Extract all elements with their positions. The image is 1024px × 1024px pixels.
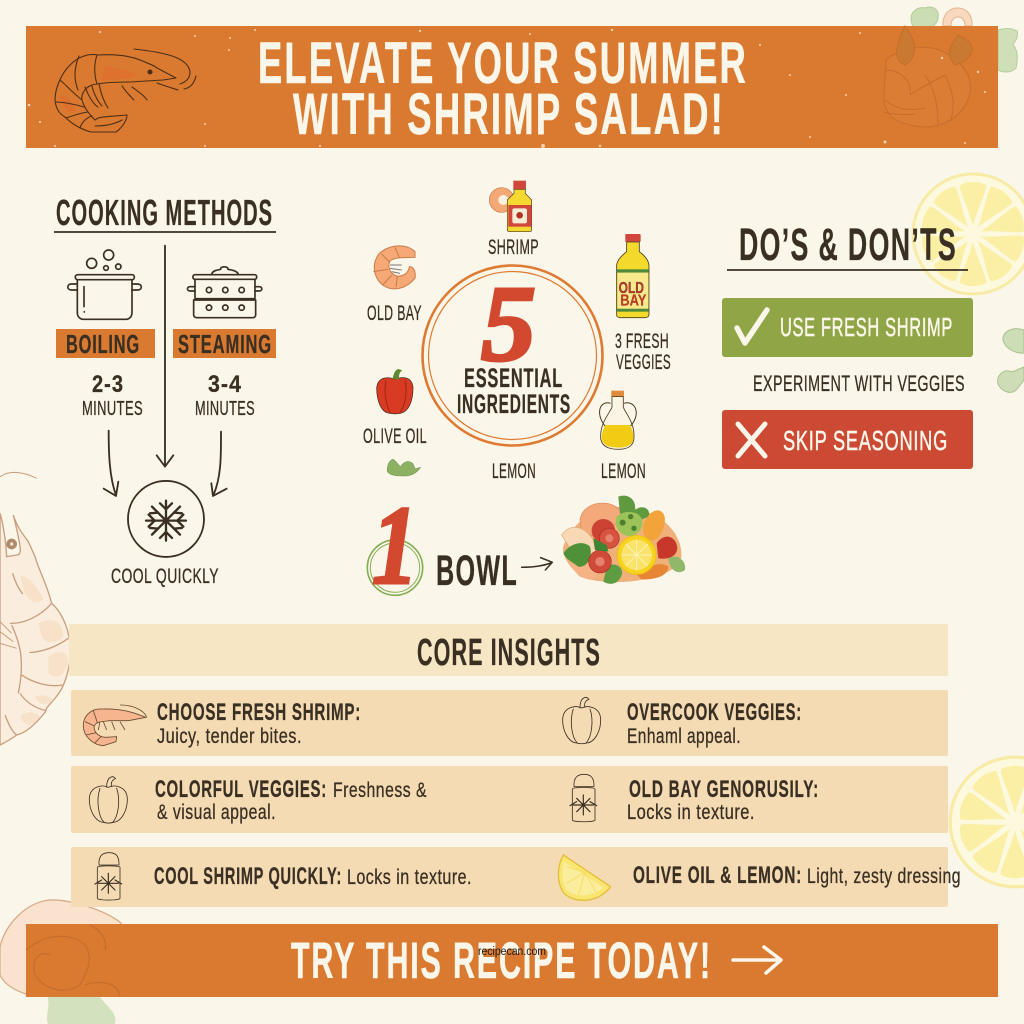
panel: do's and don'ts [722, 219, 973, 469]
row backgrounds [71, 690, 948, 907]
icons: left column [83, 705, 147, 900]
icon: salad bowl [562, 496, 685, 584]
ingredient labels: VEGGIES [616, 351, 671, 374]
ingredient labels: 3 FRESH [615, 330, 669, 353]
faded shrimp lines in footer [26, 925, 120, 997]
call to action: TRY THIS RECIPE TODAY! [291, 932, 712, 989]
badge ring for number one [367, 540, 423, 595]
icon: bell pepper outline [89, 777, 127, 823]
icon: small shrimp [83, 705, 147, 746]
label: steaming [173, 329, 276, 359]
core insights heading: CORE INSIGHTS [417, 632, 601, 674]
icon: olive oil jug [600, 391, 636, 449]
cool quickly label: COOL QUICKLY [111, 565, 219, 588]
icons in zoom coordinates [367, 181, 685, 595]
icon: lemon wedge [558, 855, 611, 900]
insight: colorful veggies [155, 776, 427, 824]
insight: overcook veggies: Enhaml appeal. [627, 725, 741, 748]
steaming time [195, 371, 255, 420]
ingredient labels: SHRIMP [488, 236, 539, 259]
insight: cool shrimp quickly: Locks in texture. [347, 866, 472, 889]
footer banner [26, 924, 998, 997]
shrimp line drawing [55, 49, 196, 132]
insight: old bay generously: Locks in texture. [627, 801, 755, 824]
insight: olive oil and lemon: OLIVE OIL & LEMON: [633, 862, 802, 889]
insight: choose fresh shrimp: CHOOSE FRESH SHRIMP: [157, 699, 361, 726]
boiling time: MINUTES [82, 398, 143, 420]
icon: bell pepper outline [563, 697, 601, 744]
header banner [26, 26, 998, 148]
cooking methods heading: COOKING METHODS [56, 192, 273, 233]
title: ELEVATE YOUR SUMMER [258, 31, 748, 96]
ingredient labels: OLD BAY [367, 302, 422, 325]
steaming time: 3-4 [208, 371, 242, 398]
bowl label: BOWL [436, 547, 518, 595]
arrow to salad [522, 558, 552, 570]
label: boiling: BOILING [66, 329, 140, 359]
decoration: large pale shrimp left edge [0, 472, 71, 745]
ingredient labels: LEMON [601, 460, 646, 483]
panel: cooking methods [54, 192, 276, 588]
arrows to cooling [104, 246, 227, 496]
ingredient labels: OLIVE OIL [363, 425, 427, 448]
icon: boiling pot [68, 250, 141, 319]
insight: colorful veggies: & visual appeal. [157, 801, 276, 824]
arrow: call to action [733, 947, 781, 973]
icon: shrimp and seasoning bottle [489, 181, 532, 232]
decoration: lemon slice top right [913, 174, 1024, 294]
insight: colorful veggies: Freshness & [333, 779, 427, 802]
boiling time: 2-3 [92, 371, 124, 398]
label: steaming: STEAMING [178, 329, 272, 359]
do: use fresh shrimp [722, 298, 973, 357]
icon: old bay bottle: BAY [620, 293, 647, 310]
core insights heading [69, 624, 948, 676]
insight: choose fresh shrimp: Juicy, tender bites. [157, 725, 302, 748]
ring caption [457, 363, 571, 419]
title: WITH SHRIMP SALAD! [293, 82, 725, 147]
big number one: 1 [372, 484, 418, 608]
watermark: recipecan.com [478, 946, 546, 958]
title [258, 31, 748, 147]
steaming time: MINUTES [195, 398, 255, 420]
insight: choose fresh shrimp [157, 699, 361, 748]
icon: herb leaves [387, 459, 421, 476]
insight: old bay generously [627, 776, 819, 824]
icon: old bay bottle: OLD [619, 280, 644, 297]
icon: old bay bottle [617, 234, 649, 318]
icon: snowflake circle [128, 481, 204, 557]
icon: red bell pepper [377, 369, 413, 414]
ingredient ring [422, 266, 602, 446]
decoration: top right herbs and shrimp ring [911, 7, 1017, 72]
icons: right column [558, 697, 611, 900]
insight: old bay generously: OLD BAY GENORUSILY: [629, 776, 819, 803]
ring caption: ESSENTIAL [464, 363, 563, 393]
insight: olive oil and lemon: Light, zesty dressing [807, 865, 961, 888]
icon: steamer pot [187, 267, 262, 318]
decoration: herb sprig right edge [998, 329, 1024, 392]
insight: colorful veggies: COLORFUL VEGGIES: [155, 776, 327, 803]
don't: skip seasoning [722, 410, 973, 469]
ingredient labels: LEMON [492, 460, 536, 483]
label: boiling [56, 329, 155, 359]
panel: essential ingredients [363, 181, 685, 608]
boiling time [82, 371, 143, 420]
panel: core insights [69, 624, 961, 907]
big number five: 5 [481, 265, 536, 384]
decoration: lemon slice lower right [950, 757, 1024, 887]
decoration: pale shrimp bottom left [0, 900, 121, 1024]
insight: overcook veggies: OVERCOOK VEGGIES: [627, 699, 802, 726]
insight: overcook veggies [627, 699, 802, 748]
insight: cool shrimp quickly: COOL SHRIMP QUICKLY: [154, 863, 342, 890]
icon: snowflake shaker [570, 774, 597, 822]
ring caption: INGREDIENTS [457, 389, 571, 419]
icon: snowflake shaker [95, 853, 122, 900]
ingredient labels [363, 236, 671, 483]
faded shrimp in banner [884, 26, 972, 127]
icon: curled shrimp [373, 246, 415, 289]
